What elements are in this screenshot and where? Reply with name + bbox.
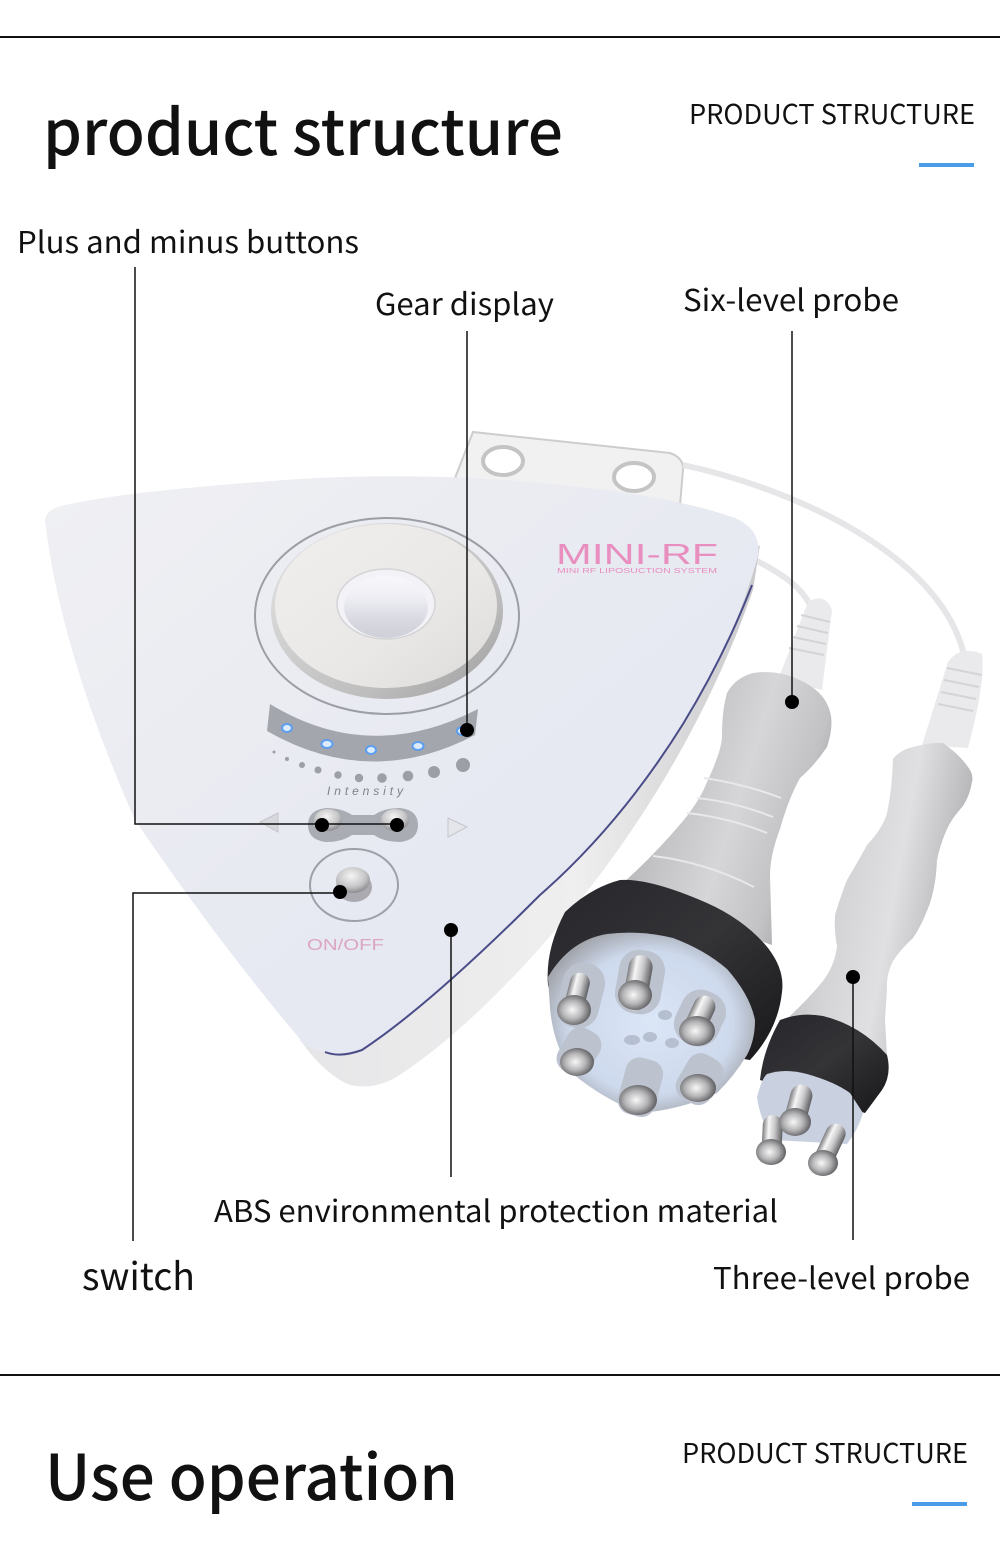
- mounting bracket: [455, 432, 683, 505]
- title: product structure: product structure: [43, 83, 563, 174]
- control dial: [255, 518, 519, 714]
- callout: switch: switch: [82, 1246, 195, 1301]
- title: use operation: Use operation: [45, 1428, 458, 1519]
- callout: three-level probe: [713, 970, 970, 1298]
- ribbed connector: [778, 598, 832, 690]
- plus and minus control: [260, 808, 467, 842]
- section tag: product structure: [689, 93, 975, 167]
- metal handle: [615, 672, 832, 945]
- metal handle: [780, 743, 972, 1055]
- section tag: use operation: PRODUCT STRUCTURE: [682, 1432, 968, 1471]
- callout: three-level probe: Three-level probe: [713, 1254, 970, 1298]
- callout: ABS environmental protection material: [214, 923, 778, 1231]
- probe pins: [551, 946, 733, 1120]
- intensity label: Intensity: [327, 784, 404, 798]
- callout: six-level probe: Six-level probe: [683, 276, 899, 320]
- MINI-RF logo: [556, 539, 718, 575]
- lower divider: [0, 1374, 1000, 1376]
- section tag: product structure: PRODUCT STRUCTURE: [689, 93, 975, 132]
- black collar: [548, 880, 782, 1060]
- callout: gear display: [375, 280, 554, 737]
- callout: gear display: Gear display: [375, 280, 554, 324]
- lens face: [757, 1071, 863, 1144]
- black collar: [760, 1015, 889, 1113]
- six-level probe: [548, 598, 832, 1120]
- lens perforations: [624, 1010, 679, 1048]
- callout: six-level probe: [683, 276, 899, 709]
- cable to three-level probe: [683, 465, 966, 665]
- callout: plus and minus buttons: [17, 218, 404, 832]
- MINI-RF logo: MINI-RF: [556, 539, 718, 571]
- gear display strip: [267, 704, 478, 762]
- probe pins: [756, 1082, 849, 1176]
- callout: ABS environmental protection material: ABS environmental protection material: [214, 1187, 778, 1231]
- intensity dots: [272, 750, 470, 783]
- on/off label: ON/OFF: [307, 937, 384, 954]
- lens face: [548, 933, 755, 1113]
- callout: plus and minus buttons: Plus and minus buttons: [17, 218, 359, 262]
- power button: [310, 849, 398, 921]
- ribbed connector: [922, 651, 983, 748]
- cable to six-level probe: [755, 560, 812, 610]
- three-level probe: [756, 651, 983, 1176]
- top divider: [0, 36, 1000, 38]
- section tag: use operation: [682, 1432, 968, 1506]
- callout: switch: [82, 885, 347, 1301]
- MINI-RF logo: MINI RF LIPOSUCTION SYSTEM: [557, 568, 717, 575]
- main device body: [45, 476, 760, 1086]
- device illustration: [45, 432, 983, 1176]
